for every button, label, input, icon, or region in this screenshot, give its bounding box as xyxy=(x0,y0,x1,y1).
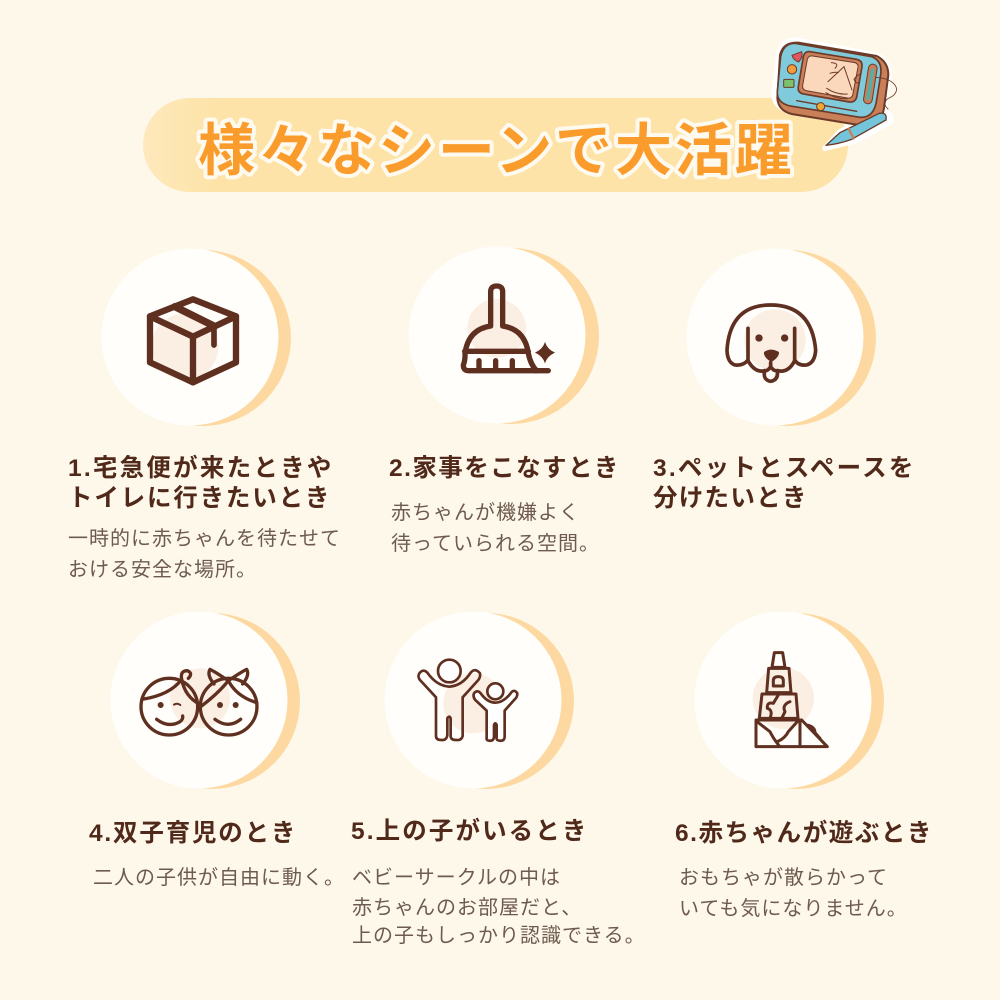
panel: scene 1 delivery: トイレに行きたいとき xyxy=(68,484,331,512)
panel: scene 5 older sibling xyxy=(351,612,646,947)
panel: scene 2 housework xyxy=(389,246,620,555)
icon: drawing tablet xyxy=(775,41,897,148)
icon: cardboard box xyxy=(150,299,236,382)
description 5: ベビーサークルの中は xyxy=(352,866,561,889)
heading 1: 1.宅急便が来たときや xyxy=(68,453,333,482)
circle backdrop 6 xyxy=(694,612,884,789)
panel: scene 2 housework: 待っていられる空間。 xyxy=(391,532,600,555)
circle backdrop 1 xyxy=(102,248,291,426)
circle backdrop 5 xyxy=(384,612,574,789)
icon: dog xyxy=(727,305,816,381)
description 2: 赤ちゃんが機嫌よく xyxy=(391,501,580,524)
heading 4: 4.双子育児のとき xyxy=(89,819,297,847)
panel: scene 6 toys: いても気になりません。 xyxy=(679,897,908,920)
description 4: 二人の子供が自由に動く。 xyxy=(93,866,345,889)
description 6: おもちゃが散らかって xyxy=(679,866,888,889)
icon: broom xyxy=(463,286,555,371)
circle backdrop 4 xyxy=(110,612,300,789)
panel: scene 1 delivery: おける安全な場所。 xyxy=(68,558,257,581)
panel: scene 3 pet: 分けたいとき xyxy=(653,484,808,512)
icon: parent and child xyxy=(418,660,517,741)
icon: block tower xyxy=(753,653,827,747)
heading 3: 3.ペットとスペースを xyxy=(653,455,915,482)
panel: scene 1 delivery xyxy=(68,248,341,581)
panel: scene 5 older sibling: 赤ちゃんのお部屋だと、 xyxy=(352,896,582,919)
panel: scene 6 toys xyxy=(675,612,933,920)
panel: scene 5 older sibling: 上の子もしっかり認識できる。 xyxy=(352,924,646,947)
panel: scene 3 pet xyxy=(653,248,915,512)
heading 6: 6.赤ちゃんが遊ぶとき xyxy=(675,818,933,847)
title banner xyxy=(143,98,848,192)
circle backdrop 2 xyxy=(408,246,599,424)
heading 5: 5.上の子がいるとき xyxy=(351,816,588,845)
heading 2: 2.家事をこなすとき xyxy=(389,454,620,482)
panel: scene 4 twins xyxy=(89,612,345,889)
icon: twin faces xyxy=(141,668,257,735)
circle backdrop 3 xyxy=(686,248,876,426)
description 1: 一時的に赤ちゃんを待たせて xyxy=(68,527,341,550)
title: 様々なシーンで大活躍 xyxy=(198,119,792,183)
